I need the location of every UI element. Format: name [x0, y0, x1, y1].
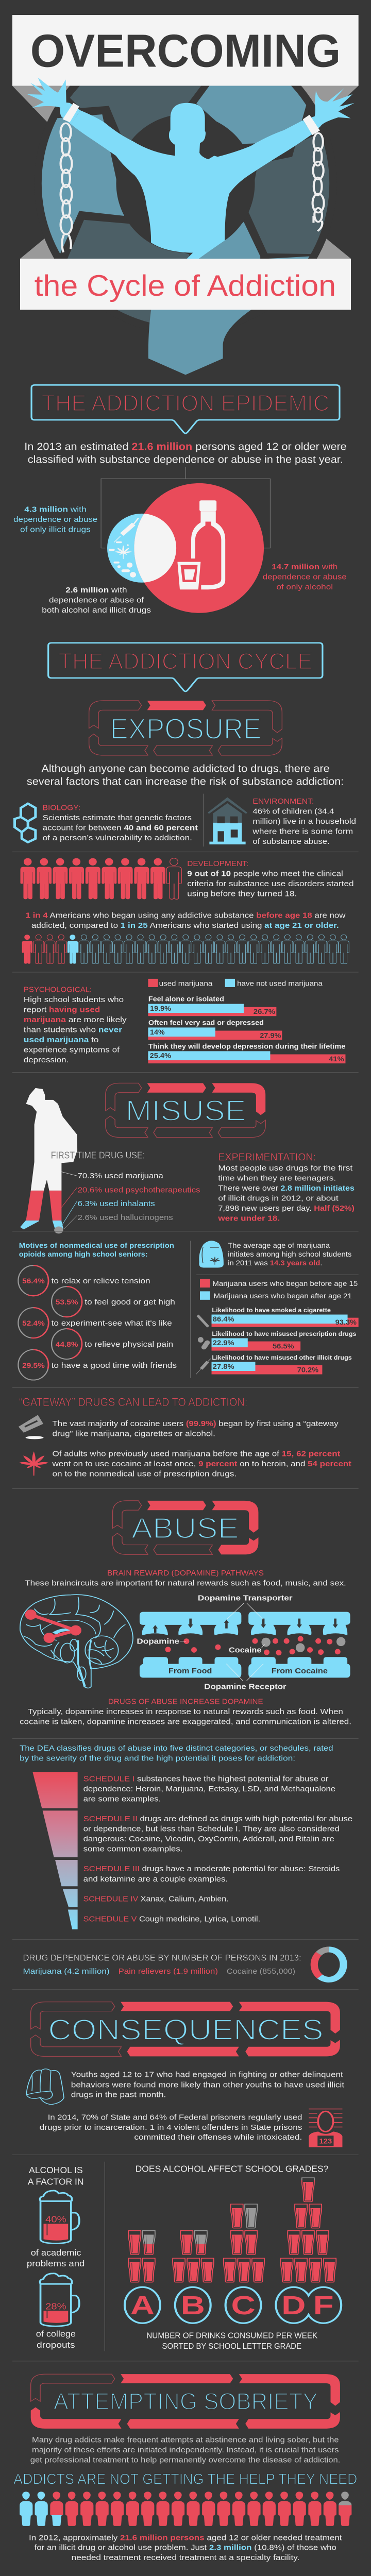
text: biology: BIOLOGY: [43, 804, 80, 812]
text: 1 in 4 versus 1 in 25 [26, 911, 346, 930]
icon: mugshot: 123 [319, 2138, 332, 2145]
list: first time drug use: FIRST TIME DRUG USE: [51, 1150, 145, 1161]
chart: motives rings: 29.5% [22, 1362, 45, 1369]
text: average age: initiates among high school students [228, 1250, 352, 1259]
text: brain reward pathways: These braincircuits are important for natural rewards such as food, music, and sex. [25, 1579, 346, 1587]
section: help and relapse [12, 2435, 359, 2576]
text: schedule IV: SCHEDULE IV Xanax, Calium, Ambien. [83, 1894, 229, 1903]
icon: beer mug 28 percent: 28% [45, 2301, 66, 2312]
cycle frame: exposure [89, 701, 282, 755]
text: 1 in 4 versus 1 in 25: 1 in 4 Americans who began using any addictive substance before age 18 are now [26, 911, 346, 920]
text: attempts at abstinence: Many drug addicts make frequent attempts at abstinence and living sober, but the [32, 2435, 339, 2444]
heading: motives: opioids among high school seniors: [19, 1250, 148, 1259]
chart: motives rings: 44.8% [56, 1341, 78, 1349]
text: youths [71, 2071, 344, 2099]
text: DEA classification: by the severity of the drug and the high potential it poses for addiction: [20, 1754, 295, 1762]
diagram: dopamine synapse: From Food [168, 1667, 212, 1675]
text: biology: of a person’s vulnerability to addiction. [43, 834, 192, 842]
bar chart: likelihood: Likelihood to have misused other illicit drugs [212, 1354, 352, 1361]
caption: drinks per week: SORTED BY SCHOOL LETTER GRADE [162, 2342, 301, 2351]
text: prisoners: committed their offenses while intoxicated. [134, 2133, 302, 2142]
bar chart: marijuana and depression: Feel alone or isolated [148, 995, 224, 1003]
label: alcohol only: dependence or abuse [263, 573, 347, 581]
icon: beer mug 28 percent [40, 2274, 79, 2326]
text: experimentation: Most people use drugs for the first [218, 1164, 353, 1172]
list: first time drug use [51, 1150, 200, 1229]
icon: beer mug 40 percent: 40% [45, 2214, 66, 2225]
text: gateway adults: Of adults who previously used marijuana before the age of 15, 62 percent [52, 1450, 341, 1458]
chart: motives rings: 53.5% [56, 1298, 78, 1307]
cycle frame: consequences [31, 2002, 340, 2056]
diagram: dopamine synapse: From Cocaine [272, 1667, 328, 1675]
icon: syringe and pills [109, 518, 139, 578]
bar chart: marijuana and depression [148, 995, 345, 1063]
text: experimentation: were under 18. [217, 1214, 280, 1223]
chart: motives rings: to relax or relieve tension [52, 1277, 150, 1285]
text: prisoners: drugs prior to incarceration. 1 in 4 violent offenders in State prisons [40, 2123, 302, 2131]
text: youths: Youths aged 12 to 17 who had engaged in fighting or other delinquent [71, 2071, 343, 2079]
text: psychological: PSYCHOLOGICAL: [24, 986, 92, 994]
text: biology: account for between 40 and 60 percent [43, 824, 198, 832]
intro text: several factors that can increase the risk of substance addiction: [27, 775, 344, 787]
label: alcohol only: of only alcohol [276, 583, 333, 591]
chart: motives rings: to feel good or get high [85, 1298, 175, 1307]
text: drugs of abuse increase dopamine: DRUGS OF ABUSE INCREASE DOPAMINE [108, 1698, 263, 1706]
bar chart: marijuana and depression: 26.7% [254, 1008, 276, 1016]
label: transporter: Dopamine Transporter [198, 1594, 293, 1602]
bar chart: likelihood: 27.8% [213, 1363, 234, 1370]
chart: motives rings [18, 1265, 177, 1380]
text: development [187, 859, 354, 898]
arrow: teal ring tail pointing down [148, 308, 255, 375]
label: both: 2.6 million with [65, 586, 127, 595]
icon: fist [26, 2069, 64, 2105]
heading bubble: THE ADDICTION CYCLE [58, 649, 312, 674]
cycle frame: abuse: ABUSE [131, 1513, 239, 1545]
bar chart: marijuana and depression: 25.4% [150, 1052, 171, 1060]
text: gateway cocaine: The vast majority of cocaine users (99.9%) began by first using a “gateway [52, 1419, 339, 1428]
text: average age: in 2011 was 14.3 years old. [228, 1259, 322, 1267]
intro text [27, 762, 344, 787]
cycle frame: misuse [106, 1083, 265, 1138]
label: illicit drugs only: of only illicit drugs [20, 526, 91, 534]
bar chart: likelihood: Likelihood to have smoked a cigarette [212, 1307, 331, 1314]
bar chart: likelihood: 70.2% [297, 1366, 319, 1374]
text: gateway adults: on to the nonmedical use of prescription drugs. [52, 1470, 237, 1478]
text: dependence by number of persons: Marijuana (4.2 million) [23, 1967, 110, 1976]
text: dependence by number of persons: Pain relievers (1.9 million) [119, 1967, 218, 1976]
text: environment [252, 797, 356, 846]
list: first time drug use: 70.3% used marijuana [78, 1172, 163, 1180]
banner: top [12, 15, 359, 86]
text: environment: 46% of children (34.4 [252, 807, 334, 816]
caption: drinks per week: NUMBER OF DRINKS CONSUMED PER WEEK [146, 2331, 317, 2340]
text: schedule I: dependence: Heroin, Marijuana, Ectsasy, LSD, and Methaqualone [83, 1785, 335, 1793]
text: average age: The average age of marijuana [228, 1242, 330, 1249]
text: psychological: depression. [24, 1056, 69, 1064]
text: treatment statistics [29, 2533, 342, 2562]
icon: mugshot [309, 2109, 342, 2147]
text: prisoners [40, 2113, 302, 2142]
text: drugs of abuse increase dopamine: cocaine is taken, dopamine increases are exaggerated, and communication is altered. [20, 1718, 351, 1726]
intro text: In 2013 an estimated 21.6 million persons aged 12 or older were [24, 441, 347, 452]
grade circles [125, 2287, 341, 2323]
illustration: recycling arrows ring [41, 86, 330, 323]
text: experimentation: of illicit drugs in 2012, or about [218, 1194, 339, 1202]
text: college dropouts: dropouts [37, 2341, 75, 2350]
intro text: classified with substance dependence or abuse in the past year. [28, 453, 343, 465]
venn diagram [107, 483, 264, 613]
text: schedule III: SCHEDULE III drugs have a moderate potential for abuse: Steroids [83, 1865, 340, 1873]
text: environment: million) live in a household [252, 817, 356, 826]
diagram: dopamine synapse: Dopamine Receptor [204, 1683, 286, 1691]
text: college dropouts [36, 2330, 76, 2350]
subtitle: the Cycle of Addiction [35, 269, 336, 302]
text: development: 9 out of 10 people who meet the clinical [187, 870, 343, 878]
section: alcohol and attempting sobriety [12, 2155, 359, 2429]
cycle frame: abuse [113, 1501, 258, 1554]
brain pathways [25, 1609, 81, 1643]
list: first time drug use: 6.3% used inhalants [78, 1199, 155, 1208]
diagram: dopamine synapse: Cocaine [229, 1646, 261, 1654]
text: environment: where there is some form [252, 827, 353, 836]
text: academic problems [27, 2248, 85, 2269]
heading: alcohol is a factor in [28, 2165, 84, 2187]
diagram: dopamine synapse [137, 1594, 350, 1691]
bar chart: likelihood [212, 1307, 359, 1375]
bar chart: likelihood: 22.9% [213, 1339, 234, 1347]
icon: beer mug 40 percent [40, 2191, 79, 2244]
heading: gateway drugs: “GATEWAY” DRUGS CAN LEAD TO ADDICTION: [19, 1396, 247, 1409]
text: brain reward pathways [25, 1569, 346, 1587]
text: gateway adults [52, 1450, 352, 1478]
grade circles: C [231, 2291, 256, 2320]
text: environment: of substance abuse. [252, 838, 330, 846]
intro text [24, 441, 347, 465]
bar chart: marijuana and depression: Think they will develop depression during their lifetime [148, 1043, 345, 1050]
text: treatment statistics: for an illicit drug or alcohol use problem. Just 2.3 million (10.8%) of those who [35, 2544, 336, 2552]
label: illicit drugs only [13, 505, 97, 534]
cycle frame: misuse: MISUSE [125, 1094, 246, 1127]
bar chart: likelihood: 56.5% [273, 1343, 294, 1350]
text: development: criteria for substance use disorders started [187, 879, 354, 888]
grade circles: D [281, 2291, 306, 2320]
grade circles: F [313, 2291, 334, 2320]
heading: motives [19, 1242, 174, 1259]
legend: marijuana: used marijuana [159, 980, 213, 988]
text: dependence by number of persons: Cocaine (855,000) [227, 1967, 295, 1976]
text: psychological: marijuana are more likely [24, 1015, 127, 1024]
chart: motives rings: to experiment-see what it's like [52, 1319, 172, 1328]
legend: age of first use: Marijuana users who began after age 21 [214, 1292, 352, 1300]
text: environment: ENVIRONMENT: [252, 797, 314, 806]
bar chart: likelihood: 86.4% [213, 1315, 234, 1324]
text: schedule I [83, 1775, 335, 1803]
grade circles: B [181, 2291, 205, 2320]
cycle frame: consequences: CONSEQUENCES [48, 2013, 324, 2046]
text: attempts at abstinence [30, 2435, 340, 2464]
text: schedule I: SCHEDULE I substances have the highest potential for abuse or [83, 1775, 329, 1783]
text: treatment statistics: In 2012, approximately 21.6 million persons aged 12 or older needed treatment [29, 2533, 342, 2542]
text: psychological: High school students who [24, 995, 124, 1004]
illustration: teen silhouette [19, 1085, 80, 1233]
text: gateway cocaine [52, 1419, 339, 1438]
text: experimentation: 7,898 new users per day. Half (52%) [218, 1204, 355, 1213]
text: gateway cocaine: drug” like marijuana, cigarettes or alcohol. [52, 1430, 215, 1438]
text: brain reward pathways: BRAIN REWARD (DOPAMINE) PATHWAYS [107, 1569, 264, 1578]
icon: marijuana leaf [19, 1451, 48, 1476]
funnel: schedules [32, 1772, 78, 1929]
text: psychological: report having used [24, 1006, 100, 1014]
text: DEA classification: The DEA classifies drugs of abuse into five distinct categories, or schedules, rated [20, 1744, 333, 1753]
text: schedule I: are some examples. [83, 1795, 161, 1803]
chart: motives rings: to have a good time with friends [52, 1361, 177, 1369]
text: schedule III [83, 1865, 340, 1883]
text: psychological: used marijuana to [24, 1036, 99, 1044]
text: average age [228, 1242, 352, 1267]
chart: motives rings: 52.4% [22, 1319, 45, 1328]
heading bubble [31, 385, 340, 433]
list: first time drug use: 20.6% used psychotherapeutics [78, 1186, 200, 1194]
icon: backpack [199, 1241, 224, 1267]
text: schedule II: SCHEDULE II drugs are defined as drugs with high potential for abuse [83, 1815, 352, 1823]
pictogram: 9 of 10 people [20, 858, 181, 899]
text: psychological: experience symptoms of [24, 1046, 120, 1054]
label: alcohol only: 14.7 million with [272, 563, 338, 571]
text: experimentation: EXPERIMENTATION: [218, 1151, 316, 1163]
label: both: dependence or abuse of [49, 596, 144, 604]
text: psychological: than students who never [24, 1026, 122, 1034]
pictogram: people receiving treatment [20, 2492, 351, 2526]
text: experimentation [217, 1151, 355, 1223]
label: illicit drugs only: 4.3 million with [24, 505, 87, 514]
text: biology: Scientists estimate that genetic factors [43, 814, 192, 822]
text: schedule V: SCHEDULE V Cough medicine, Lyrica, Lomotil. [83, 1914, 260, 1923]
text: gateway adults: went on to use cocaine at least once, 9 percent on to heroin, and 54 percent [52, 1460, 352, 1468]
text: youths: drugs in the past month. [71, 2091, 166, 2099]
banner: bottom [20, 259, 351, 310]
donut chart [314, 1950, 344, 1979]
text: schedule II: some common examples. [83, 1845, 183, 1853]
text: experimentation: There were over 2.8 million initiates [218, 1184, 355, 1193]
text: development: using before they turned 18. [187, 890, 297, 898]
heading bubble [48, 643, 323, 691]
text: 1 in 4 versus 1 in 25: addicted, compared to 1 in 25 Americans who started using at age 21 or older. [31, 922, 339, 930]
text: development: DEVELOPMENT: [187, 859, 248, 868]
icon: razor and powder [19, 1415, 43, 1439]
label: both: both alcohol and illicit drugs [42, 606, 151, 615]
text: dependence by number of persons [23, 1954, 301, 1976]
heading: alcohol is a factor in: A FACTOR IN [28, 2177, 84, 2187]
cycle frame: exposure: EXPOSURE [110, 713, 261, 745]
icon: bottle and glass [177, 500, 225, 589]
grade circles: A [130, 2291, 155, 2320]
label: alcohol only [263, 563, 347, 591]
cycle frame: attempting sobriety [31, 2374, 340, 2429]
bar chart: marijuana and depression: 27.9% [260, 1032, 281, 1040]
pictogram: 4 red and 25 blue people [22, 935, 349, 964]
chart: motives rings: to relieve physical pain [85, 1340, 173, 1349]
text: academic problems: of academic [31, 2248, 81, 2258]
illustration: man breaking chains [27, 77, 355, 259]
list: first time drug use: 2.6% used hallucinogens [78, 1213, 173, 1222]
text: prisoners: In 2014, 70% of State and 64% of Federal prisoners regularly used [48, 2113, 302, 2122]
bar chart: marijuana and depression: 41% [329, 1055, 344, 1063]
legend: marijuana: have not used marijuana [237, 980, 323, 988]
section: the addiction cycle, exposure [12, 643, 359, 930]
section: motives, gateway drugs, abuse [12, 1241, 359, 1554]
label: both [42, 586, 151, 615]
icon: house [208, 797, 247, 844]
section: brain and schedules [12, 1569, 359, 1929]
legend: age of first use: Marijuana users who began before age 15 [212, 1280, 358, 1288]
text: drugs of abuse increase dopamine: Typically, dopamine increases in response to natural rewards such as food. When [28, 1708, 343, 1716]
legend: marijuana [148, 979, 323, 988]
bar chart: marijuana and depression: 14% [150, 1028, 165, 1037]
icon: molecule [14, 804, 36, 842]
text: experimentation: time when they are teenagers. [218, 1174, 336, 1182]
illustration: brain [20, 1595, 133, 1688]
hero section [12, 15, 359, 375]
text: schedule II: dangerous: Cocaine, Vicodin, OxyContin, Adderall, and Ritalin are [83, 1835, 334, 1843]
bar chart: marijuana and depression: Often feel very sad or depressed [148, 1019, 264, 1027]
text: psychological [24, 986, 127, 1064]
section: the addiction epidemic [13, 385, 347, 615]
legend: age of first use [200, 1279, 358, 1300]
text: drugs of abuse increase dopamine [20, 1698, 351, 1726]
text: college dropouts: of college [36, 2330, 76, 2339]
caption: drinks per week [146, 2331, 317, 2351]
icons: cigarette, pills, syringe [196, 1315, 211, 1375]
text: schedule II: or dependence, but less than Schedule I. They are also considered [83, 1825, 340, 1833]
diagram: dopamine synapse: Dopamine [137, 1637, 179, 1646]
text: biology [43, 804, 198, 842]
text: schedule III: and ketamine are a couple examples. [83, 1875, 228, 1883]
intro text: Although anyone can become addicted to drugs, there are [41, 762, 330, 774]
text: treatment statistics: needed treatment received treatment at a specialty facility. [72, 2553, 299, 2562]
text: DEA classification [20, 1744, 333, 1762]
heading: alcohol is a factor in: ALCOHOL IS [29, 2165, 83, 2175]
section: schedules continued and consequences [12, 1865, 359, 2147]
label: illicit drugs only: dependence or abuse [13, 515, 97, 524]
bar chart: marijuana and depression: 19.9% [150, 1005, 171, 1013]
bar chart: likelihood: 93.3% [335, 1318, 357, 1327]
pictogram: drinks per week by grade [128, 2178, 336, 2282]
text: attempts at abstinence: majority of these efforts are initiated independently. Instead, it is crucial that users [32, 2446, 339, 2454]
chart: motives rings: 56.4% [22, 1277, 45, 1285]
heading: motives: Motives of nonmedical use of prescription [19, 1242, 174, 1249]
text: schedule II [83, 1815, 352, 1853]
text: youths: behaviors were found more likely than other youths to have used illicit [71, 2080, 344, 2089]
section: psychological and misuse [12, 935, 359, 1233]
text: academic problems: problems and [27, 2259, 85, 2269]
